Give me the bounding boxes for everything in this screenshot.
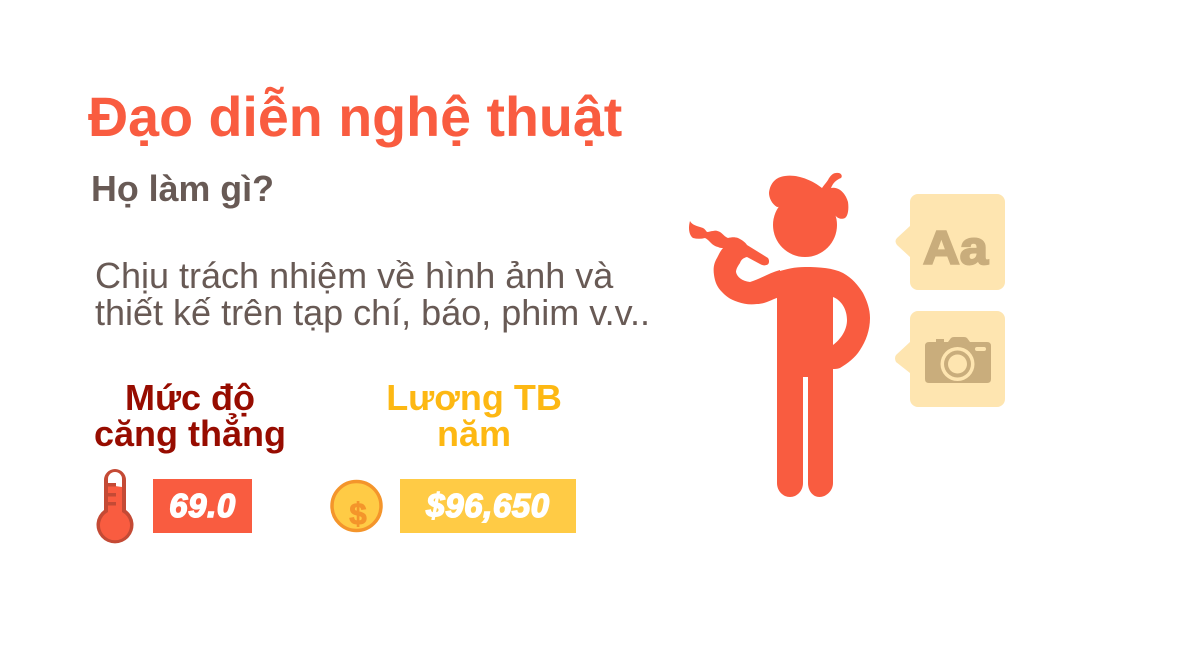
salary label: năm bbox=[437, 413, 511, 454]
stress value bbox=[153, 479, 252, 533]
icon: camera bubble bbox=[895, 311, 1005, 407]
stress label: căng thẳng bbox=[94, 413, 286, 454]
description text: Chịu trách nhiệm về hình ảnh và bbox=[95, 254, 613, 296]
body and right arm bbox=[777, 267, 870, 497]
description text bbox=[95, 254, 650, 332]
stress label: Mức độ bbox=[125, 377, 255, 418]
stress value: 69.0 bbox=[169, 487, 236, 524]
salary label: Lương TB bbox=[386, 377, 562, 418]
icon: thermometer bbox=[96, 469, 134, 543]
arm holding brush bbox=[689, 221, 780, 304]
icon: dollar coin: $ bbox=[349, 496, 367, 531]
description text: thiết kế trên tạp chí, báo, phim v.v.. bbox=[95, 292, 650, 332]
icon: dollar coin bbox=[332, 482, 381, 531]
salary value bbox=[400, 479, 576, 533]
icon: typography bubble bbox=[896, 194, 1005, 290]
icon: typography bubble: Aa bbox=[923, 221, 989, 274]
head bbox=[773, 193, 837, 257]
beret bbox=[769, 173, 848, 219]
figure: art director with brush bbox=[689, 173, 870, 497]
salary label bbox=[386, 377, 562, 454]
subheading: Họ làm gì? bbox=[91, 169, 274, 209]
title: Đạo diễn nghệ thuật bbox=[88, 86, 622, 148]
salary value: $96,650 bbox=[426, 487, 550, 524]
stress label bbox=[94, 377, 286, 454]
